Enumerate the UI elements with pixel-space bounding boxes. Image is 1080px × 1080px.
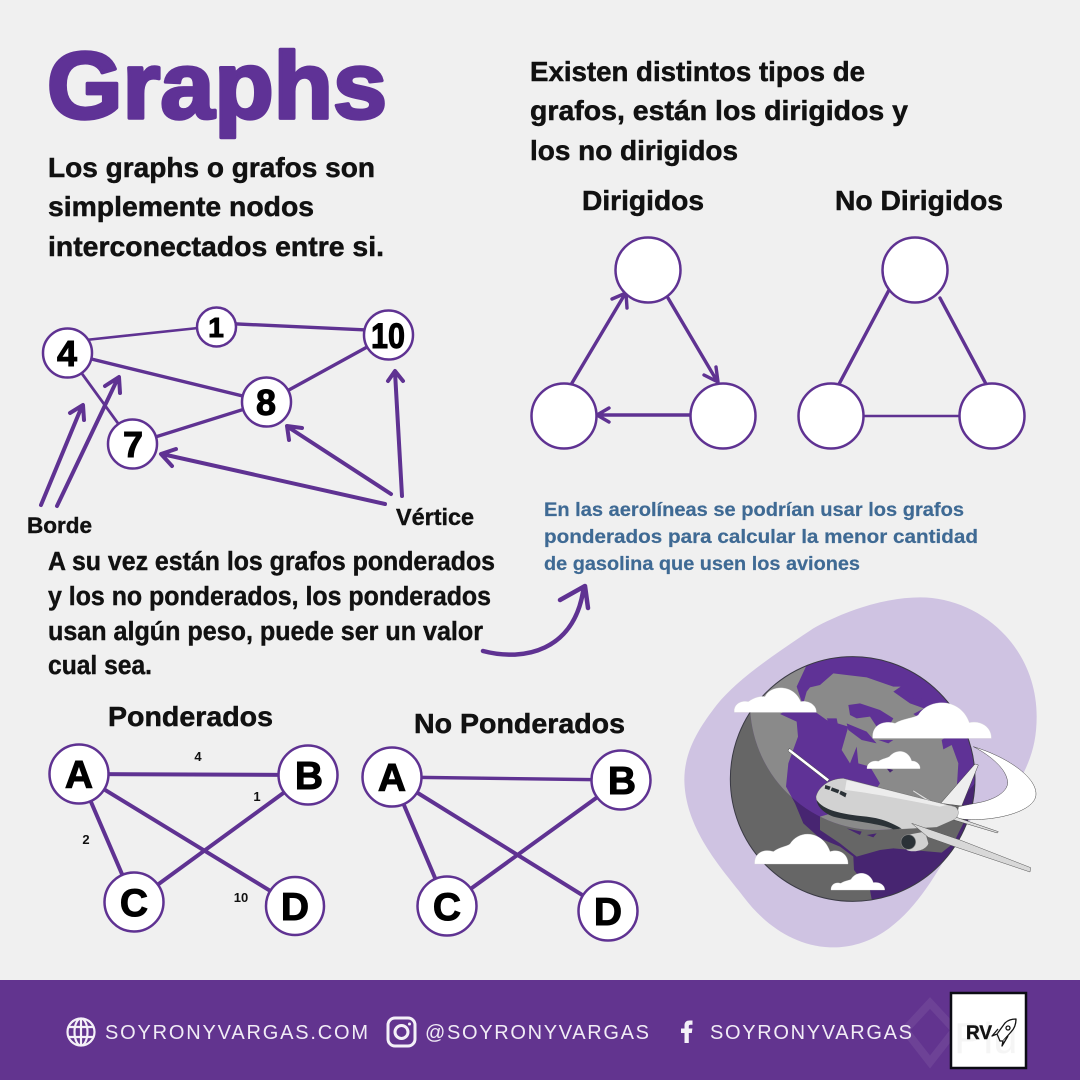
- unweighted graph: [362, 748, 650, 940]
- icon: globe: [68, 1018, 94, 1046]
- unweighted graph: B: [608, 760, 636, 803]
- watermark text: Plu: [954, 1014, 1018, 1063]
- text block: ponderados: A su vez están los grafos ponderados: [48, 548, 495, 576]
- node 1: 1: [208, 312, 224, 343]
- node 1: [197, 308, 236, 346]
- node 8: [242, 378, 291, 426]
- clouds: [734, 688, 991, 890]
- edge weights: [82, 749, 261, 905]
- weighted graph: C: [120, 882, 148, 925]
- node 7: [108, 420, 157, 468]
- callout: aerolíneas: de gasolina que usen los aviones: [544, 553, 860, 575]
- node 10: [364, 310, 413, 360]
- logo: RV rocket: RV: [966, 1023, 992, 1044]
- callout: aerolíneas: En las aerolíneas se podrían usar los grafos: [544, 499, 964, 521]
- panel: example graph with labels: [27, 308, 474, 538]
- icon: instagram: [388, 1018, 415, 1046]
- intro text block: [48, 152, 384, 262]
- intro text block: simplemente nodos: [48, 191, 314, 222]
- text block: ponderados: y los no ponderados, los ponderados: [48, 583, 491, 611]
- text block: ponderados: usan algún peso, puede ser un valor: [48, 618, 483, 646]
- intro text block: interconectados entre si.: [48, 231, 384, 262]
- node 7: 7: [123, 424, 143, 465]
- undirected graph: [798, 238, 1024, 448]
- swoosh: [957, 747, 1036, 820]
- facebook text: SOYRONYVARGAS: [710, 1022, 912, 1044]
- text block: tipos de grafos: los no dirigidos: [530, 135, 738, 166]
- text block: tipos de grafos: [530, 56, 908, 166]
- website text: SOYRONYVARGAS.COM: [105, 1022, 368, 1044]
- directed graph: [532, 238, 756, 448]
- title: Graphs: [47, 33, 387, 139]
- unweighted graph: A: [378, 757, 406, 800]
- icon: facebook: [681, 1020, 692, 1043]
- airplane: [788, 748, 1031, 872]
- weighted graph: A: [65, 754, 93, 797]
- node 4: 4: [57, 333, 77, 374]
- instagram text: @SOYRONYVARGAS: [425, 1022, 649, 1044]
- arrows to edges: [41, 377, 120, 506]
- edge weights: 4: [194, 749, 202, 764]
- heading: No Ponderados: No Ponderados: [414, 708, 625, 739]
- label: Vértice: Vértice: [396, 504, 474, 530]
- logo: RV rocket: [951, 993, 1026, 1068]
- weighted graph: D: [281, 886, 309, 929]
- heading: Ponderados: Ponderados: [108, 701, 273, 732]
- unweighted graph: D: [594, 891, 622, 934]
- edge weights: 10: [234, 890, 248, 905]
- watermark diamond: [905, 1003, 955, 1062]
- edge weights: 1: [253, 789, 261, 804]
- callout: aerolíneas: ponderados para calcular la menor cantidad: [544, 526, 978, 548]
- unweighted graph: C: [433, 886, 461, 929]
- text block: ponderados: cual sea.: [48, 652, 152, 680]
- weighted graph: [50, 744, 338, 935]
- node 10: 10: [371, 317, 405, 356]
- graph edges: [67, 323, 389, 444]
- intro text block: Los graphs o grafos son: [48, 152, 375, 183]
- background blob: [684, 597, 1037, 947]
- globe: [730, 657, 974, 901]
- heading: No Dirigidos: No Dirigidos: [835, 185, 1003, 216]
- node 4: [43, 328, 92, 378]
- arrow: curved to callout: [483, 586, 588, 655]
- footer bar: [0, 980, 1080, 1080]
- text block: tipos de grafos: Existen distintos tipos de: [530, 56, 865, 87]
- node 8: 8: [256, 382, 276, 423]
- text block: ponderados: [48, 548, 495, 680]
- heading: Dirigidos: Dirigidos: [582, 185, 704, 216]
- label: Borde: Borde: [27, 513, 92, 538]
- illustration: globe and airplane: [684, 573, 1037, 947]
- callout: aerolíneas: [544, 499, 978, 575]
- text block: tipos de grafos: grafos, están los dirigidos y: [530, 95, 908, 126]
- weighted graph: B: [295, 755, 323, 798]
- edge weights: 2: [82, 832, 90, 847]
- arrows to vertices: [161, 371, 403, 504]
